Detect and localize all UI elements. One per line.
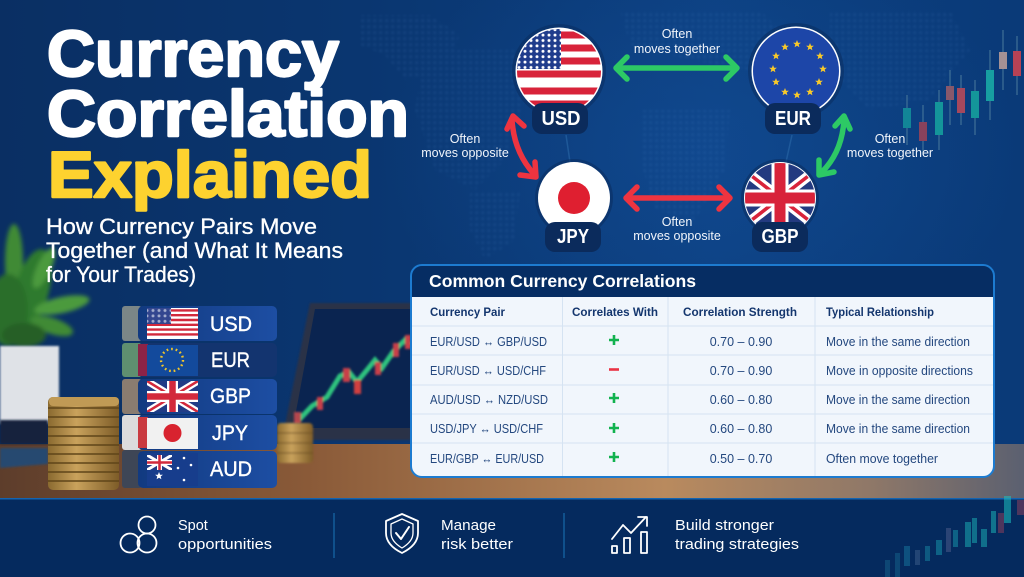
table column headers (430, 305, 934, 319)
node: GBP: GBP (762, 226, 798, 248)
coin stack: right (277, 423, 313, 463)
table row: EUR/GBP EUR/USD: EUR/GBP ↔ EUR/USD (430, 452, 544, 466)
plant pot (0, 346, 59, 424)
table row: EUR/GBP EUR/USD: 0.50 – 0.70 (710, 452, 772, 466)
table row: EUR/USD GBP/USD (430, 335, 970, 349)
table row: AUD/USD NZD/USD: 0.60 – 0.80 (710, 393, 772, 407)
label: EUR GBP relation: moves together (847, 146, 933, 160)
node: GBP (741, 159, 819, 252)
benefit: build stronger trading strategies (612, 517, 799, 553)
arrow: JPY to GBP, red (626, 187, 730, 209)
table row: AUD/USD NZD/USD: AUD/USD ↔ NZD/USD (430, 393, 548, 407)
table row: EUR/USD GBP/USD: Move in the same direction (826, 335, 970, 349)
connector lines (566, 135, 792, 162)
node: JPY: JPY (557, 226, 590, 248)
dark keyboard on the left (0, 420, 48, 468)
label: USD EUR relation: moves together (634, 42, 720, 56)
subtitle: How Currency Pairs Move (46, 214, 317, 239)
plant (0, 224, 91, 347)
benefit: manage risk better: Manage (441, 518, 496, 534)
benefit: spot opportunities (120, 516, 272, 553)
label: USD JPY relation: moves opposite (421, 146, 509, 160)
table column headers: Correlates With (572, 305, 658, 319)
title: Explained (48, 138, 372, 211)
table row: USD/JPY USD/CHF (430, 422, 970, 436)
arrow: USD to JPY, red (507, 116, 536, 177)
benefit: build stronger trading strategies: Build stronger (675, 518, 774, 534)
node: EUR (748, 23, 844, 134)
laptop chart (294, 335, 411, 424)
title: Currency (47, 17, 339, 90)
table row: EUR/USD GBP/USD: EUR/USD ↔ GBP/USD (430, 335, 547, 349)
block: GBP: GBP (210, 385, 251, 408)
benefit: manage risk better (386, 514, 513, 553)
icon: shield with check (386, 514, 418, 553)
arrow: EUR to GBP, green (819, 116, 850, 175)
background: dotted world map (360, 10, 970, 260)
table row: EUR/GBP EUR/USD (430, 452, 938, 466)
table row: EUR/USD USD/CHF: Move in opposite directions (826, 364, 973, 378)
table row: EUR/USD USD/CHF (430, 364, 973, 378)
footer candlesticks (885, 496, 1024, 577)
table row: USD/JPY USD/CHF: 0.60 – 0.80 (710, 422, 772, 436)
label: JPY GBP relation: Often (662, 215, 692, 229)
node: USD: USD (542, 108, 580, 130)
coin stack: left (48, 397, 119, 490)
correlation diagram (421, 23, 933, 252)
label: USD JPY relation (421, 132, 509, 160)
subtitle: for Your Trades) (46, 262, 196, 287)
background glow (380, 0, 1020, 370)
laptop on the desk (285, 303, 411, 440)
block: AUD: AUD (210, 458, 252, 481)
panel: common currency correlations table (411, 265, 994, 477)
title: Correlation (47, 77, 409, 150)
footer dividers (334, 513, 564, 558)
table row: EUR/GBP EUR/USD: Often move together (826, 452, 938, 466)
block: GBP (122, 379, 277, 414)
block: USD (122, 306, 277, 341)
table row: AUD/USD NZD/USD: Move in the same direction (826, 393, 970, 407)
table row: USD/JPY USD/CHF: USD/JPY ↔ USD/CHF (430, 422, 543, 436)
block: USD: USD (210, 313, 252, 336)
footer band (0, 496, 1024, 577)
table row: EUR/USD USD/CHF: EUR/USD ↔ USD/CHF (430, 364, 546, 378)
block: AUD (122, 450, 277, 488)
table row: AUD/USD NZD/USD (430, 393, 970, 407)
title (47, 17, 409, 211)
label: USD EUR relation: Often (662, 27, 692, 41)
table heading: Common Currency Correlations (429, 271, 696, 291)
node: EUR: EUR (775, 108, 811, 130)
benefit: spot opportunities: opportunities (178, 537, 272, 553)
block: JPY: JPY (212, 422, 248, 445)
label: EUR GBP relation: Often (875, 132, 905, 146)
label: EUR GBP relation (847, 132, 933, 160)
table column headers: Correlation Strength (683, 305, 797, 319)
block: JPY (122, 415, 277, 450)
node: JPY (535, 159, 613, 252)
table column headers: Typical Relationship (826, 305, 934, 319)
benefit: build stronger trading strategies: trading strategies (675, 537, 799, 553)
table row: USD/JPY USD/CHF: Move in the same direction (826, 422, 970, 436)
label: USD EUR relation (634, 27, 720, 56)
candlestick chart: top right background (903, 30, 1021, 155)
icon: linked circles (120, 516, 156, 552)
arrow: USD to EUR, green (616, 57, 737, 79)
label: JPY GBP relation (633, 215, 721, 243)
subtitle (46, 214, 343, 287)
benefit: manage risk better: risk better (441, 537, 513, 553)
label: USD JPY relation: Often (450, 132, 480, 146)
benefit: spot opportunities: Spot (178, 518, 208, 534)
desk (0, 444, 1024, 498)
table row: EUR/USD USD/CHF: 0.70 – 0.90 (710, 364, 772, 378)
icon: rising bars and arrow (612, 517, 647, 553)
currency block stack (122, 306, 277, 488)
table row: EUR/USD GBP/USD: 0.70 – 0.90 (710, 335, 772, 349)
block: EUR (122, 343, 277, 377)
subtitle: Together (and What It Means (46, 238, 343, 263)
block: EUR: EUR (211, 349, 250, 372)
node: USD (512, 24, 606, 134)
table column headers: Currency Pair (430, 305, 505, 319)
label: JPY GBP relation: moves opposite (633, 229, 721, 243)
